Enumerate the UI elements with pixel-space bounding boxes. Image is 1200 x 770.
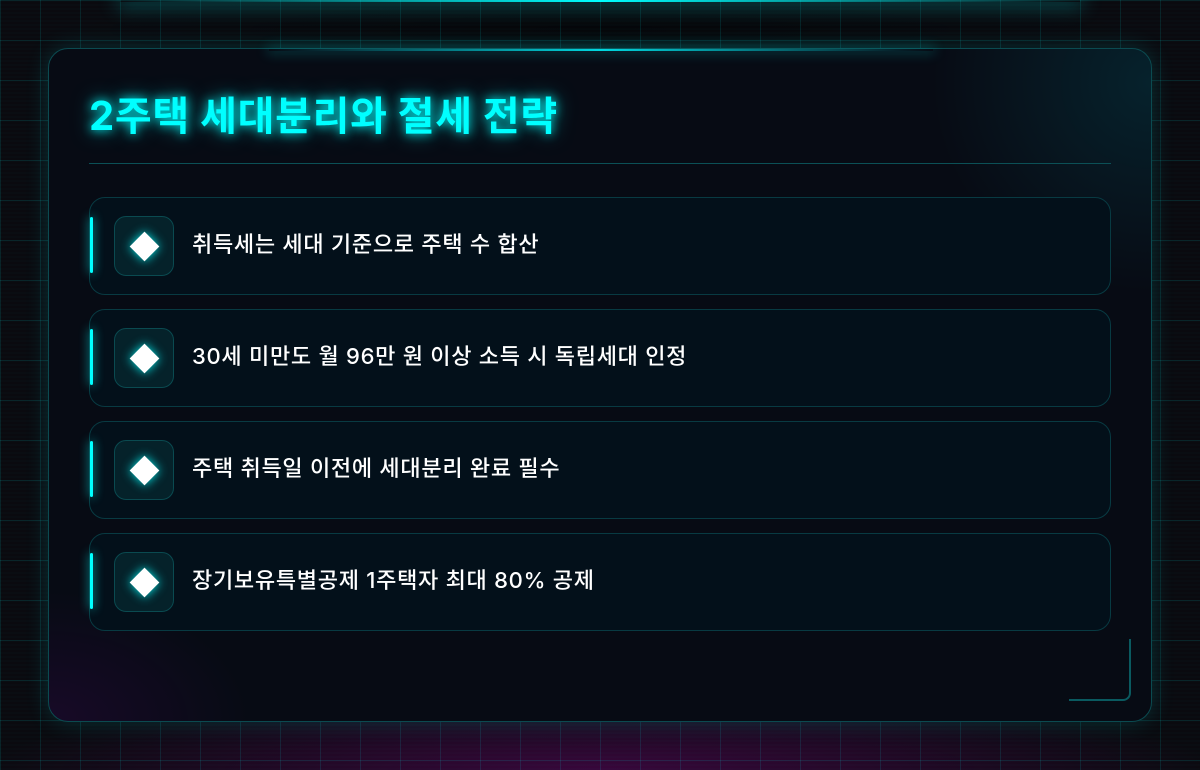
list item: acquisition tax <box>89 197 1111 295</box>
icon: diamond <box>114 216 174 276</box>
list item: separation timing <box>89 421 1111 519</box>
text: independent household: 30세 미만도 월 96만 원 이상 소득 시 독립세대 인정 <box>192 344 687 370</box>
text: separation timing: 주택 취득일 이전에 세대분리 완료 필수 <box>192 456 560 482</box>
text: long-term deduction: 장기보유특별공제 1주택자 최대 80% 공제 <box>192 568 595 594</box>
list item: independent household <box>89 309 1111 407</box>
title: 2주택 세대분리와 절세 전략 <box>89 91 558 140</box>
icon: diamond <box>114 552 174 612</box>
list item: long-term deduction <box>89 533 1111 631</box>
icon: diamond <box>114 328 174 388</box>
icon: diamond <box>114 440 174 500</box>
text: acquisition tax: 취득세는 세대 기준으로 주택 수 합산 <box>192 232 539 258</box>
